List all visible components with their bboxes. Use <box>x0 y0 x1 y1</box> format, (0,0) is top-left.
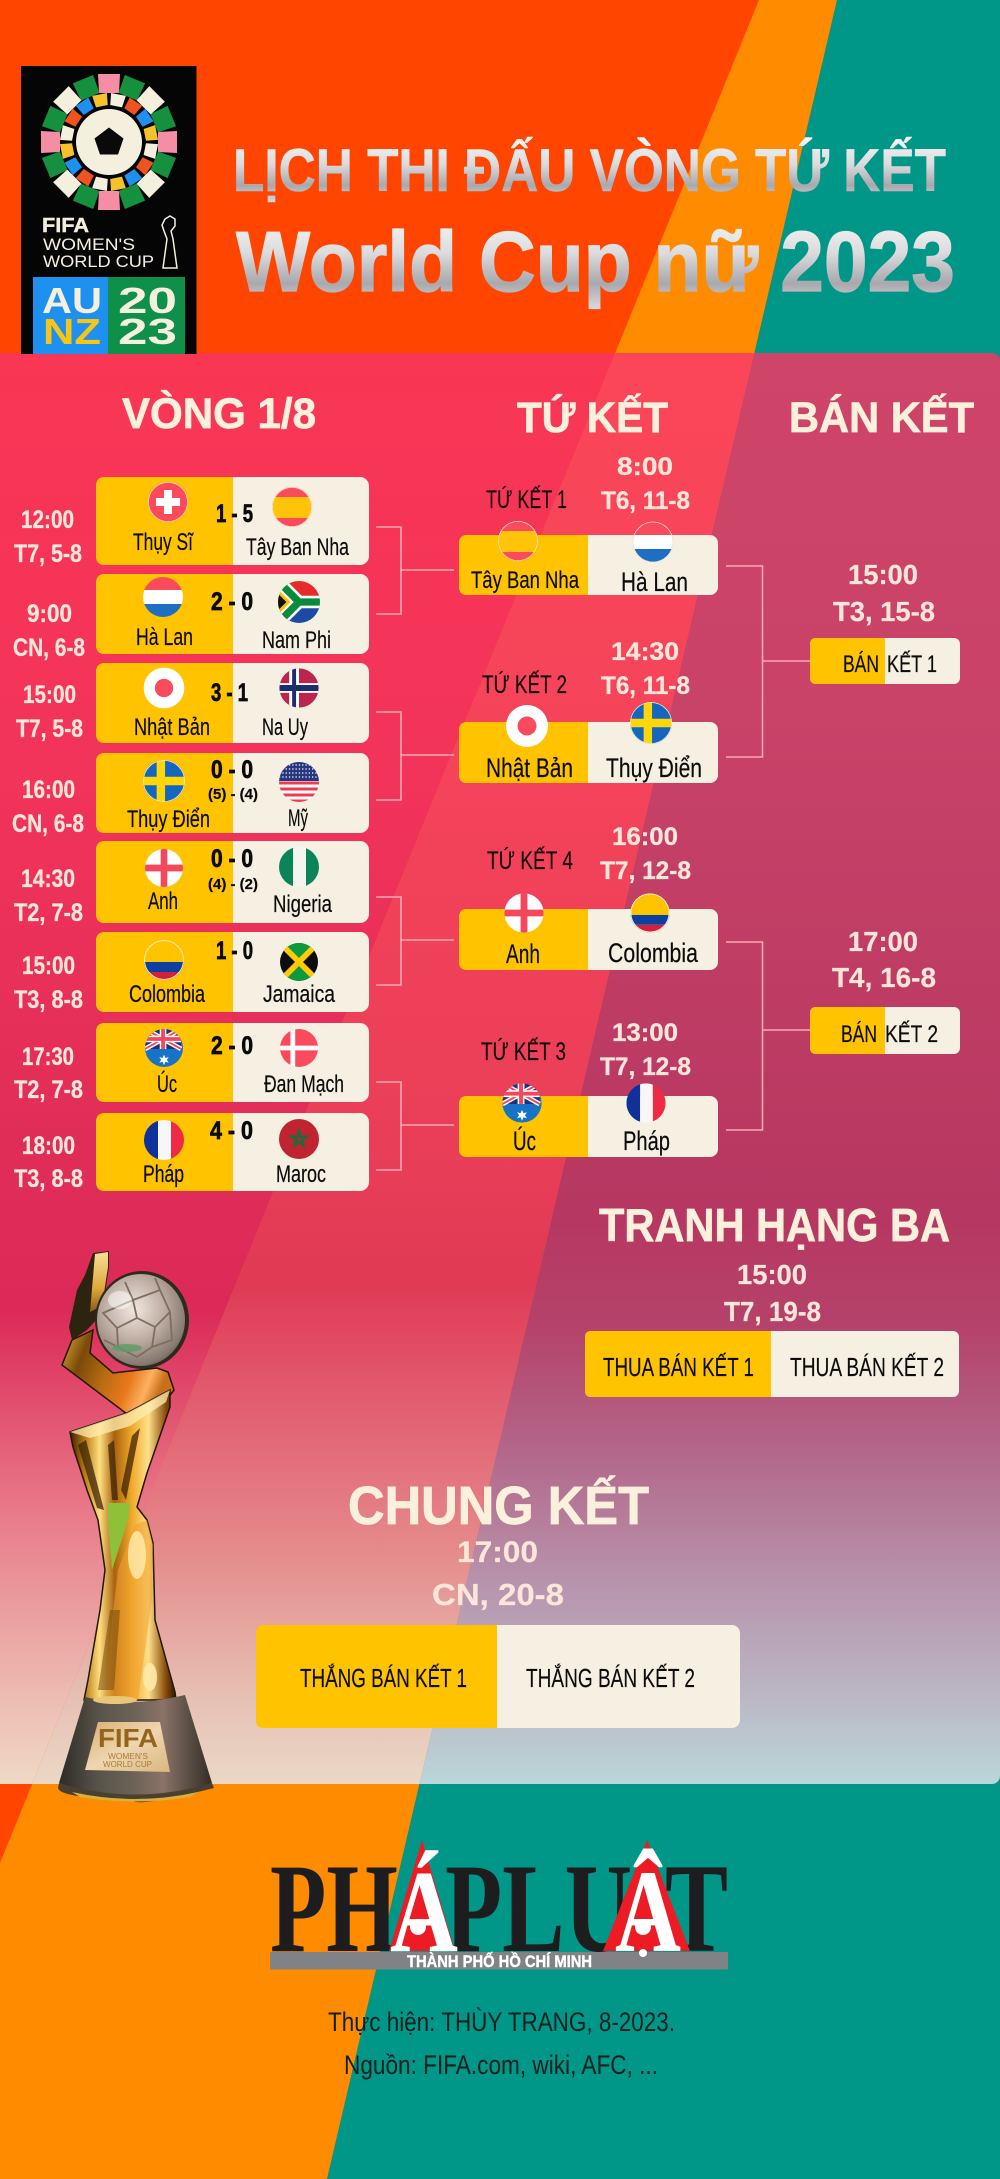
match: Hà Lan vs Nam Phi: CN, 6-8 <box>13 634 85 662</box>
quarter-final 2: TỨ KẾT 2 <box>482 670 567 699</box>
match: Colombia vs Jamaica: 1 - 0 <box>216 937 253 965</box>
panel: semi-final 1: BÁN <box>843 651 879 678</box>
quarter-final 3: TỨ KẾT 3 <box>481 1037 566 1066</box>
title <box>233 137 955 310</box>
panel: round of 16 matches <box>12 477 369 1193</box>
credits: Thực hiện: THÙY TRANG, 8-2023. <box>328 2006 675 2037</box>
logo: AU NZ 2023 block: AU <box>42 280 102 321</box>
panel: third-place match: T7, 19-8 <box>724 1296 821 1327</box>
trophy flame <box>69 1251 109 1340</box>
match: Hà Lan vs Nam Phi: 2 - 0 <box>211 588 253 616</box>
quarter-final 4: T7, 12-8 <box>600 857 691 885</box>
panel: final: THẮNG BÁN KẾT 2 <box>526 1663 695 1693</box>
panel: third-place match <box>585 1199 959 1397</box>
match: Anh vs Nigeria: Nigeria <box>273 891 333 918</box>
heading: round of 16: VÒNG 1/8 <box>122 389 316 438</box>
quarter-final 1: 8:00 <box>617 453 673 481</box>
logo: Pháp Luật newspaper: PLU <box>445 1839 632 1979</box>
panel: final <box>256 1476 740 1728</box>
panel: final: CN, 20-8 <box>432 1577 564 1612</box>
icon: Women's World Cup trophy <box>58 1251 214 1802</box>
trophy ball <box>95 1271 189 1369</box>
panel: semi-final 2: T4, 16-8 <box>832 962 936 993</box>
match: Thụy Điển vs Mỹ: CN, 6-8 <box>12 810 84 838</box>
quarter-final 1: TỨ KẾT 1 <box>486 485 567 514</box>
trophy base <box>58 1695 214 1802</box>
quarter-final 3: Pháp <box>623 1126 670 1156</box>
match: Thụy Sĩ vs Tây Ban Nha: 12:00 <box>21 506 74 534</box>
quarter-final 3: 13:00 <box>612 1019 678 1047</box>
quarter-final 3 <box>459 1019 718 1157</box>
match: Thụy Sĩ vs Tây Ban Nha: T7, 5-8 <box>14 540 82 568</box>
quarter-final 1 <box>459 453 718 597</box>
match: Pháp vs Maroc: Maroc <box>276 1161 326 1188</box>
logo: AU NZ 2023 block: 23 <box>118 311 177 352</box>
panel: quarter-finals <box>459 453 718 1157</box>
panel: final: 17:00 <box>457 1536 538 1569</box>
panel: third-place match: TRANH HẠNG BA <box>599 1199 950 1251</box>
quarter-final 3: T7, 12-8 <box>600 1053 691 1081</box>
quarter-final 1: Hà Lan <box>621 567 688 597</box>
match: Colombia vs Jamaica <box>14 932 369 1014</box>
match: Pháp vs Maroc: 4 - 0 <box>210 1117 253 1145</box>
logo: Pháp Luật newspaper: Ậ <box>615 1846 681 1977</box>
match: Anh vs Nigeria: Anh <box>148 888 178 915</box>
match: Nhật Bản vs Na Uy: Nhật Bản <box>134 714 210 741</box>
match: Thụy Điển vs Mỹ: (5) - (4) <box>208 786 258 803</box>
trophy body <box>70 1390 176 1700</box>
logo: Pháp Luật newspaper <box>270 1839 728 1979</box>
panel: semi-final 2: BÁN <box>841 1021 877 1048</box>
logo wordmark <box>42 215 154 271</box>
match: Thụy Sĩ vs Tây Ban Nha: Tây Ban Nha <box>246 534 349 561</box>
match: Thụy Sĩ vs Tây Ban Nha: 1 - 5 <box>216 500 253 528</box>
match: Colombia vs Jamaica: 15:00 <box>22 952 75 980</box>
match: Nhật Bản vs Na Uy: T7, 5-8 <box>16 715 83 743</box>
quarter-final 4: Colombia <box>608 938 699 968</box>
logo: Pháp Luật newspaper: THÀNH PHỐ HỒ CHÍ MINH <box>407 1951 592 1971</box>
match: Hà Lan vs Nam Phi <box>13 574 369 662</box>
logo: AU NZ 2023 block: NZ <box>43 311 101 352</box>
match: Thụy Điển vs Mỹ <box>12 753 369 838</box>
arrow: round of 16 to quarter-final 1 <box>376 527 454 614</box>
match: Anh vs Nigeria: (4) - (2) <box>208 876 258 893</box>
match: Thụy Điển vs Mỹ: 16:00 <box>22 776 75 804</box>
panel: final: CHUNG KẾT <box>348 1476 649 1536</box>
arrow: round of 16 to quarter-final 4 <box>376 897 454 985</box>
icon: small trophy <box>162 216 177 268</box>
panel: third-place match: THUA BÁN KẾT 2 <box>790 1352 944 1382</box>
trophy plaque: FIFA <box>98 1723 158 1753</box>
match: Colombia vs Jamaica: Colombia <box>129 981 205 1008</box>
match: Colombia vs Jamaica: T3, 8-8 <box>14 986 83 1014</box>
credits: Nguồn: FIFA.com, wiki, AFC, ... <box>344 2050 658 2080</box>
quarter-final 2: Thụy Điển <box>606 753 702 783</box>
trophy plaque: WOMEN'S <box>108 1752 148 1761</box>
match: Hà Lan vs Nam Phi: 9:00 <box>27 600 72 628</box>
quarter-final 4: 16:00 <box>612 823 678 851</box>
arrow: round of 16 to quarter-final 2 <box>376 712 454 800</box>
logo wordmark: WORLD CUP <box>43 252 154 271</box>
logo: AU NZ 2023 block: 20 <box>118 280 177 321</box>
panel: third-place match: THUA BÁN KẾT 1 <box>603 1352 754 1382</box>
match: Úc vs Đan Mạch: T2, 7-8 <box>14 1076 83 1104</box>
arrow: quarter-finals to semi-final 2 <box>726 942 810 1130</box>
quarter-final 4: TỨ KẾT 4 <box>487 846 573 875</box>
heading: semi-finals: BÁN KẾT <box>789 394 974 442</box>
match: Anh vs Nigeria: 0 - 0 <box>211 845 253 873</box>
match: Pháp vs Maroc: T3, 8-8 <box>14 1165 83 1193</box>
panel: semi-final 2 <box>810 926 960 1054</box>
quarter-final 1: Tây Ban Nha <box>471 567 579 594</box>
panel: semi-final 2: KẾT 2 <box>885 1020 938 1048</box>
panel: semi-final 1: T3, 15-8 <box>833 596 935 627</box>
panel: semi-final 2: 17:00 <box>848 926 918 957</box>
credits <box>328 2006 675 2080</box>
match: Pháp vs Maroc: Pháp <box>143 1161 184 1188</box>
panel: semi-final 1: 15:00 <box>848 559 918 590</box>
match: Hà Lan vs Nam Phi: Hà Lan <box>136 624 193 651</box>
title: World Cup nữ 2023 <box>236 215 955 310</box>
match: Pháp vs Maroc: 18:00 <box>22 1132 75 1160</box>
quarter-final 2 <box>459 638 718 783</box>
quarter-final 2: Nhật Bản <box>486 753 573 783</box>
quarter-final 4: Anh <box>506 939 540 969</box>
match: Nhật Bản vs Na Uy: 15:00 <box>23 681 76 709</box>
quarter-final 1: T6, 11-8 <box>601 487 690 515</box>
logo: FIFA Women's World Cup 2023 <box>21 66 196 354</box>
logo: Pháp Luật newspaper: T <box>665 1839 728 1979</box>
arrow: quarter-finals to semi-final 1 <box>726 566 810 757</box>
match: Úc vs Đan Mạch: Úc <box>157 1071 177 1098</box>
background: teal diagonal band <box>327 0 1000 2179</box>
logo: AU NZ 2023 block <box>33 277 185 354</box>
quarter-final 3: Úc <box>513 1125 536 1156</box>
trophy plaque <box>85 1722 170 1772</box>
quarter-final 4 <box>459 823 718 970</box>
panel: third-place match: 15:00 <box>737 1259 807 1290</box>
match: Hà Lan vs Nam Phi: Nam Phi <box>262 627 331 654</box>
match: Nhật Bản vs Na Uy: 3 - 1 <box>211 679 248 707</box>
panel: translucent schedule background <box>0 353 1000 1784</box>
match: Anh vs Nigeria: 14:30 <box>21 865 75 893</box>
match: Colombia vs Jamaica: Jamaica <box>263 981 336 1008</box>
match: Nhật Bản vs Na Uy <box>16 663 369 743</box>
logo: Pháp Luật newspaper: PH <box>270 1839 398 1979</box>
match: Thụy Sĩ vs Tây Ban Nha <box>14 477 369 568</box>
arrow: round of 16 to quarter-final 3 <box>376 1082 454 1170</box>
panel: final: THẮNG BÁN KẾT 1 <box>300 1663 467 1693</box>
match: Anh vs Nigeria: T2, 7-8 <box>14 899 83 927</box>
match: Thụy Điển vs Mỹ: 0 - 0 <box>211 756 253 784</box>
match: Thụy Điển vs Mỹ: Mỹ <box>288 805 308 832</box>
logo wordmark: WOMEN'S <box>43 235 135 254</box>
match: Úc vs Đan Mạch: Đan Mạch <box>264 1071 344 1098</box>
match: Úc vs Đan Mạch <box>14 1023 369 1104</box>
match: Pháp vs Maroc <box>14 1113 369 1193</box>
match: Úc vs Đan Mạch: 17:30 <box>22 1043 74 1071</box>
heading: quarter-finals: TỨ KẾT <box>517 393 668 442</box>
match: Nhật Bản vs Na Uy: Na Uy <box>262 714 308 741</box>
logo wordmark: FIFA <box>42 215 89 237</box>
match: Anh vs Nigeria <box>14 841 369 927</box>
panel: semi-final 1 <box>810 559 960 684</box>
quarter-final 2: T6, 11-8 <box>601 672 690 700</box>
icon: logo ring and football emblem <box>41 74 177 210</box>
match: Thụy Điển vs Mỹ: Thụy Điển <box>127 806 210 833</box>
panel: semi-final 1: KẾT 1 <box>887 650 937 678</box>
match: Úc vs Đan Mạch: 2 - 0 <box>211 1032 253 1060</box>
match: Thụy Sĩ vs Tây Ban Nha: Thụy Sĩ <box>133 529 194 556</box>
logo: Pháp Luật newspaper: Á <box>390 1846 458 1977</box>
trophy ribbon <box>62 1330 174 1414</box>
trophy plaque: WORLD CUP <box>103 1760 152 1769</box>
quarter-final 2: 14:30 <box>611 638 679 666</box>
